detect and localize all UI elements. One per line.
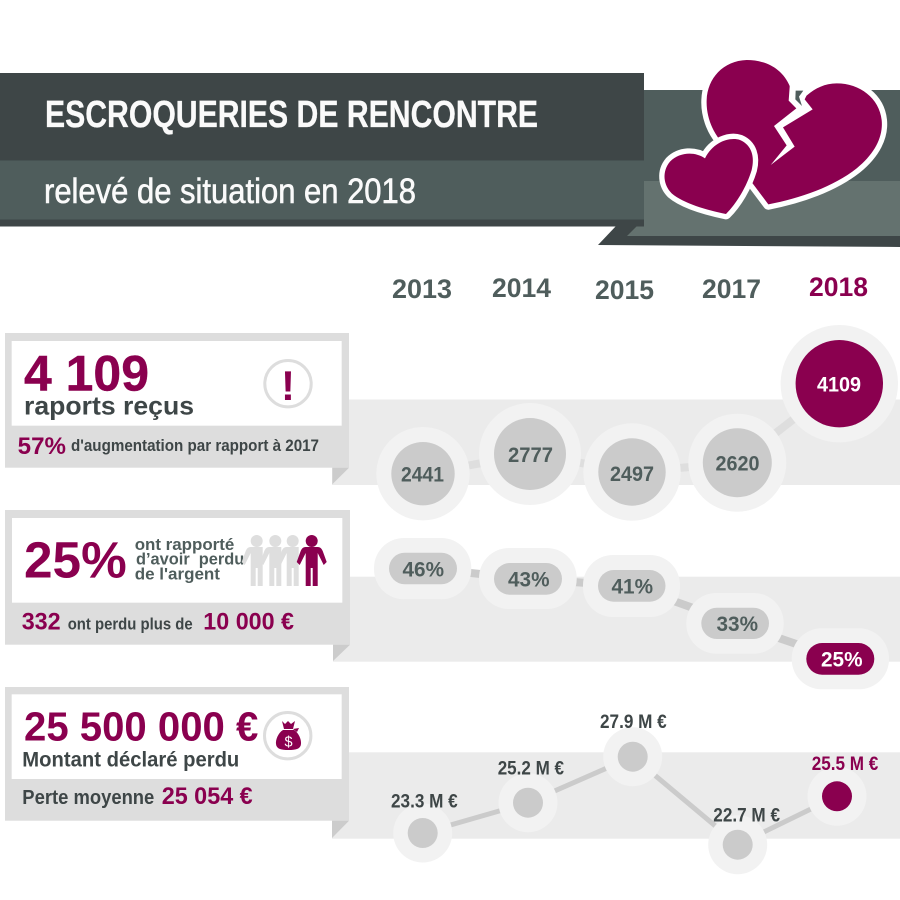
reports label: raports reçus (24, 390, 194, 420)
data point 2015: 2497 (610, 463, 654, 486)
data point 2017 (686, 593, 784, 654)
icon: money bag: $ (284, 734, 293, 750)
icon: exclamation mark: ! (281, 362, 295, 409)
data point 2017: 22.7 M € (713, 806, 780, 827)
chart: reports per year (332, 325, 900, 521)
amount threshold: 10 000 € (203, 608, 294, 635)
data point 2018 (781, 325, 898, 442)
data point 2017: 2620 (716, 452, 760, 476)
data point 2017 (708, 806, 780, 874)
data point 2017: 33% (716, 613, 758, 636)
data point 2014: 2777 (508, 444, 553, 467)
big amount: 25 500 000 € (24, 704, 258, 750)
data point 2018: 25.5 M € (812, 754, 879, 775)
data point 2013 (391, 791, 458, 862)
description: ont rapporté (135, 535, 234, 554)
year 2017: 2017 (702, 274, 761, 304)
data point 2015 (583, 555, 680, 617)
count over 10000: 332 (22, 608, 61, 635)
data point 2013 (376, 427, 470, 520)
icon: money bag (264, 712, 311, 759)
icon: four people, one highlighted (242, 535, 327, 586)
year 2014: 2014 (492, 273, 551, 303)
year headings (392, 272, 868, 305)
title: ESCROQUERIES DE RENCONTRE (45, 94, 538, 136)
panel: reports received (5, 333, 349, 484)
data point 2015 (583, 423, 681, 521)
year 2015: 2015 (595, 275, 654, 305)
data point 2015: 41% (612, 576, 653, 598)
data point 2015: 27.9 M € (600, 712, 667, 733)
description: d’avoir perdu (136, 550, 244, 569)
data point 2014 (498, 759, 564, 832)
data point 2014 (479, 548, 577, 609)
banner front ribbon (0, 73, 644, 226)
panel: amount lost (5, 687, 349, 838)
data point 2013 (374, 538, 471, 599)
data point 2013: 2441 (401, 464, 444, 486)
data point 2014 (479, 403, 581, 505)
data point 2018: 4109 (817, 374, 861, 396)
average loss amount: 25 054 € (162, 783, 253, 810)
data point 2014: 25.2 M € (498, 759, 564, 780)
year 2013: 2013 (392, 274, 452, 304)
caption: ont perdu plus de (68, 614, 193, 634)
banner (0, 60, 900, 247)
data point 2018: 25% (821, 648, 863, 672)
data point 2018 (792, 628, 889, 689)
panel: share who lost money (5, 510, 350, 661)
icon: broken heart and small heart (665, 60, 882, 214)
big percentage: 25% (24, 532, 127, 589)
description: de l'argent (135, 564, 220, 583)
increase percentage: 57% (18, 433, 66, 460)
data point 2015 (600, 712, 667, 786)
average loss label: Perte moyenne (22, 787, 154, 809)
data point 2013: 23.3 M € (391, 791, 458, 812)
icon: exclamation mark (265, 360, 311, 409)
chart: share who lost money (333, 538, 900, 689)
year 2018: 2018 (809, 272, 868, 302)
data point 2014: 43% (508, 568, 550, 592)
big number: 4 109 (24, 345, 149, 401)
subtitle: relevé de situation en 2018 (44, 172, 416, 211)
increase caption: d'augmentation par rapport à 2017 (71, 436, 319, 455)
data point 2017 (688, 414, 786, 512)
chart: amounts lost (332, 712, 900, 874)
data point 2018 (808, 754, 879, 826)
description (135, 535, 244, 583)
amount label: Montant déclaré perdu (22, 749, 239, 772)
banner back ribbon (598, 90, 900, 247)
data point 2013: 46% (402, 558, 444, 582)
